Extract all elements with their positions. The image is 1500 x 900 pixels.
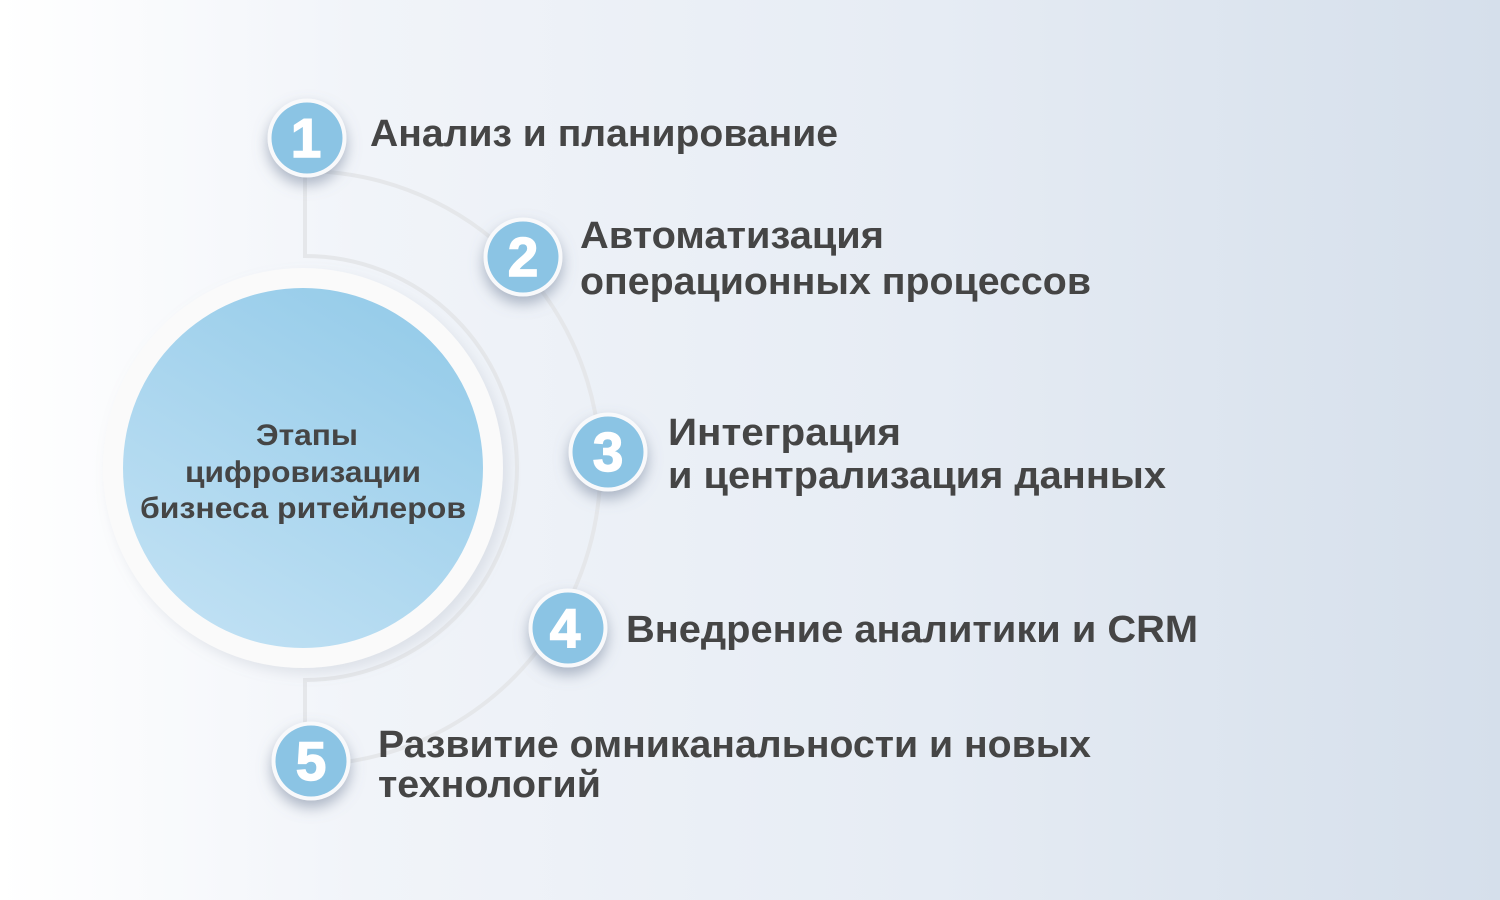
step 5: [272, 722, 1091, 806]
step 4: [528, 588, 1198, 668]
central title: [140, 419, 466, 525]
step 5: Развитие омниканальности и новых: [378, 724, 1091, 766]
central circle: [103, 268, 503, 668]
step 3: Интеграция: [668, 412, 901, 454]
step 4: Внедрение аналитики и CRM: [626, 609, 1198, 651]
step 1: [268, 98, 838, 178]
step 2: Автоматизация: [580, 215, 884, 257]
step 2: операционных процессов: [580, 261, 1091, 303]
step 1: 1: [291, 107, 321, 169]
step 2: 2: [508, 226, 538, 288]
step 4: 4: [550, 597, 581, 659]
central title: цифровизации: [185, 456, 421, 489]
step 3: 3: [593, 421, 623, 483]
step 1: Анализ и планирование: [370, 113, 838, 155]
step 2: [484, 215, 1091, 303]
step 3: и централизация данных: [668, 455, 1166, 497]
connector lines: [303, 170, 600, 761]
step 5: 5: [296, 730, 326, 792]
central title: Этапы: [256, 419, 358, 452]
central title: бизнеса ритейлеров: [140, 492, 466, 525]
step 3: [568, 412, 1166, 497]
step 5: технологий: [378, 764, 601, 806]
